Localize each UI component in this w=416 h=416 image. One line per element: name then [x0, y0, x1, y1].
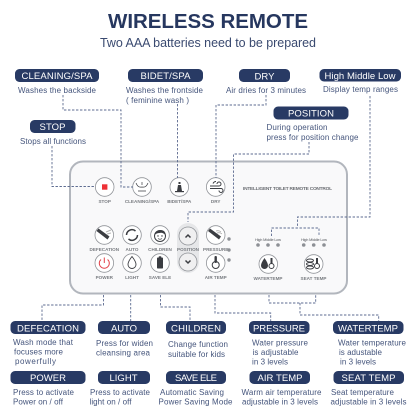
icon: seat temp: SEAT TEMP	[301, 276, 326, 281]
label: seat temp: adjustable in 3 levels	[330, 398, 406, 406]
icon: save ele: SAVE ELE	[149, 275, 171, 280]
connector: cleaning/spa	[63, 95, 133, 187]
label: children: suitable for kids	[168, 350, 225, 359]
label: position: press for position change	[266, 133, 359, 142]
icon: cleaning	[125, 178, 160, 204]
water temp levels	[255, 238, 281, 247]
connector: air temp	[215, 295, 271, 321]
icon: bidet: BIDET/SPA	[167, 199, 192, 204]
position capsule	[177, 223, 199, 273]
label: defecation: powerfully	[15, 357, 56, 366]
label: save ele: Automatic Saving	[160, 388, 224, 397]
label: light: LIGHT	[110, 373, 138, 384]
icon: auto: AUTO	[126, 247, 139, 252]
label: stop: STOP	[40, 122, 66, 133]
label: auto: cleansing area	[96, 348, 151, 358]
label: seat temp: Seat temperature	[331, 388, 395, 397]
label: defecation: focuses more	[14, 348, 64, 356]
title: WIRELESS REMOTE	[108, 10, 308, 33]
label: power: Press to activate	[13, 388, 75, 397]
label: power	[10, 371, 86, 406]
label: cleaning/spa	[15, 69, 99, 95]
label: power: Power on / off	[13, 398, 64, 406]
label: light: light on / off	[90, 398, 132, 406]
seat temp levels	[301, 238, 327, 247]
label: defecation	[10, 321, 86, 366]
label: defecation: Wash mode that	[13, 338, 74, 347]
label: position: POSITION	[288, 108, 334, 120]
label: save ele: SAVE ELE	[175, 373, 217, 384]
label: bidet/spa	[126, 69, 204, 105]
label: pressure: in 3 levels	[252, 358, 288, 366]
label: children	[166, 321, 228, 359]
label: watertemp: Water temperature	[338, 338, 407, 348]
connector: high middle low	[272, 96, 370, 236]
connector: position	[188, 142, 309, 222]
connector: water and seat temp	[269, 295, 379, 321]
connector: bidet/spa	[176, 104, 178, 178]
label: air temp	[242, 371, 322, 406]
label: light	[90, 371, 151, 406]
label: defecation: DEFECATION	[17, 324, 79, 334]
icon: children	[148, 226, 173, 252]
label: save ele	[158, 371, 233, 406]
icon: stop: STOP	[98, 199, 111, 204]
icon: pressure	[203, 226, 228, 252]
label: position: During operation	[266, 123, 328, 132]
icon: water temp: WATERTEMP	[253, 276, 283, 281]
label: high middle low: High Middle Low	[324, 71, 396, 82]
label: air temp: AIR TEMP	[258, 373, 302, 384]
icon: cleaning: CLEANING/SPA	[125, 199, 160, 204]
icon: light: LIGHT	[125, 275, 139, 280]
label: high middle low: Display temp ranges	[323, 85, 398, 94]
label: cleaning/spa: Washes the backside	[18, 86, 97, 95]
icon: position down	[179, 253, 197, 271]
icon: position up	[177, 227, 200, 252]
label: save ele: Power Saving Mode	[158, 398, 233, 406]
connector: children	[160, 295, 190, 321]
label: cleaning/spa: CLEANING/SPA	[22, 71, 93, 82]
label: watertemp	[333, 321, 407, 366]
label: dry	[226, 69, 306, 95]
label: bidet/spa: BIDET/SPA	[140, 71, 191, 82]
label: bidet/spa: ( feminine wash )	[126, 96, 189, 105]
icon: seat temp	[301, 255, 326, 281]
label: children: CHILDREN	[171, 324, 221, 334]
connector: defecation	[42, 295, 104, 321]
connector: auto	[130, 295, 132, 321]
label: pressure: PRESSURE	[253, 324, 305, 334]
label: auto: AUTO	[111, 324, 137, 334]
icon: defecation	[90, 226, 120, 252]
icon: power	[95, 254, 114, 280]
icon: dry: DRY	[211, 199, 220, 204]
connector: stop	[52, 146, 95, 186]
icon: power: POWER	[96, 275, 114, 280]
icon: air temp	[205, 254, 227, 280]
icon: save ele	[149, 254, 171, 280]
icon: stop	[95, 178, 114, 204]
label: dry: DRY	[254, 72, 275, 82]
panel heading: INTELLIGENT TOILET REMOTE CONTROL	[243, 186, 332, 192]
label: seat temp	[330, 371, 406, 406]
icon: position up: POSITION	[177, 247, 200, 252]
seat temp levels: High Middle Low	[301, 238, 327, 242]
label: dry: Air dries for 3 minutes	[226, 86, 306, 95]
subtitle: Two AAA batteries need to be prepared	[100, 36, 316, 50]
label: air temp: Warm air temperature	[242, 388, 322, 397]
icon: auto	[123, 226, 141, 252]
label: bidet/spa: Washes the frontside	[126, 86, 204, 95]
icon: dry	[206, 178, 225, 204]
level indicator dots	[227, 237, 231, 262]
label: seat temp: SEAT TEMP	[342, 373, 396, 384]
label: light: Press to activate	[90, 388, 151, 397]
label: position	[266, 106, 359, 142]
label: watertemp: in 3 levels	[340, 358, 376, 366]
label: stop	[20, 120, 86, 146]
label: children: Change function	[168, 340, 228, 349]
water temp levels: High Middle Low	[255, 238, 281, 242]
label: power: POWER	[30, 373, 66, 384]
label: pressure: Water pressure	[252, 338, 309, 348]
label: watertemp: is adustable	[339, 348, 383, 357]
icon: bidet	[167, 178, 192, 204]
label: auto	[96, 321, 153, 358]
label: stop: Stops all functions	[20, 137, 86, 146]
icon: pressure: PRESSURE	[203, 247, 228, 252]
icon: air temp: AIR TEMP	[205, 275, 227, 280]
remote control panel	[70, 162, 347, 294]
icon: water temp	[253, 255, 283, 281]
label: pressure	[249, 321, 310, 366]
label: auto: Press for widen	[96, 339, 153, 348]
label: air temp: adjustable in 3 levels	[242, 398, 318, 406]
icon: light	[123, 254, 141, 280]
icon: children: CHILDREN	[148, 247, 173, 252]
label: pressure: is adjustable	[252, 348, 299, 357]
label: watertemp: WATERTEMP	[338, 324, 398, 334]
label: high middle low	[320, 69, 401, 94]
icon: defecation: DEFECATION	[90, 247, 120, 252]
connector: dry	[216, 95, 266, 178]
